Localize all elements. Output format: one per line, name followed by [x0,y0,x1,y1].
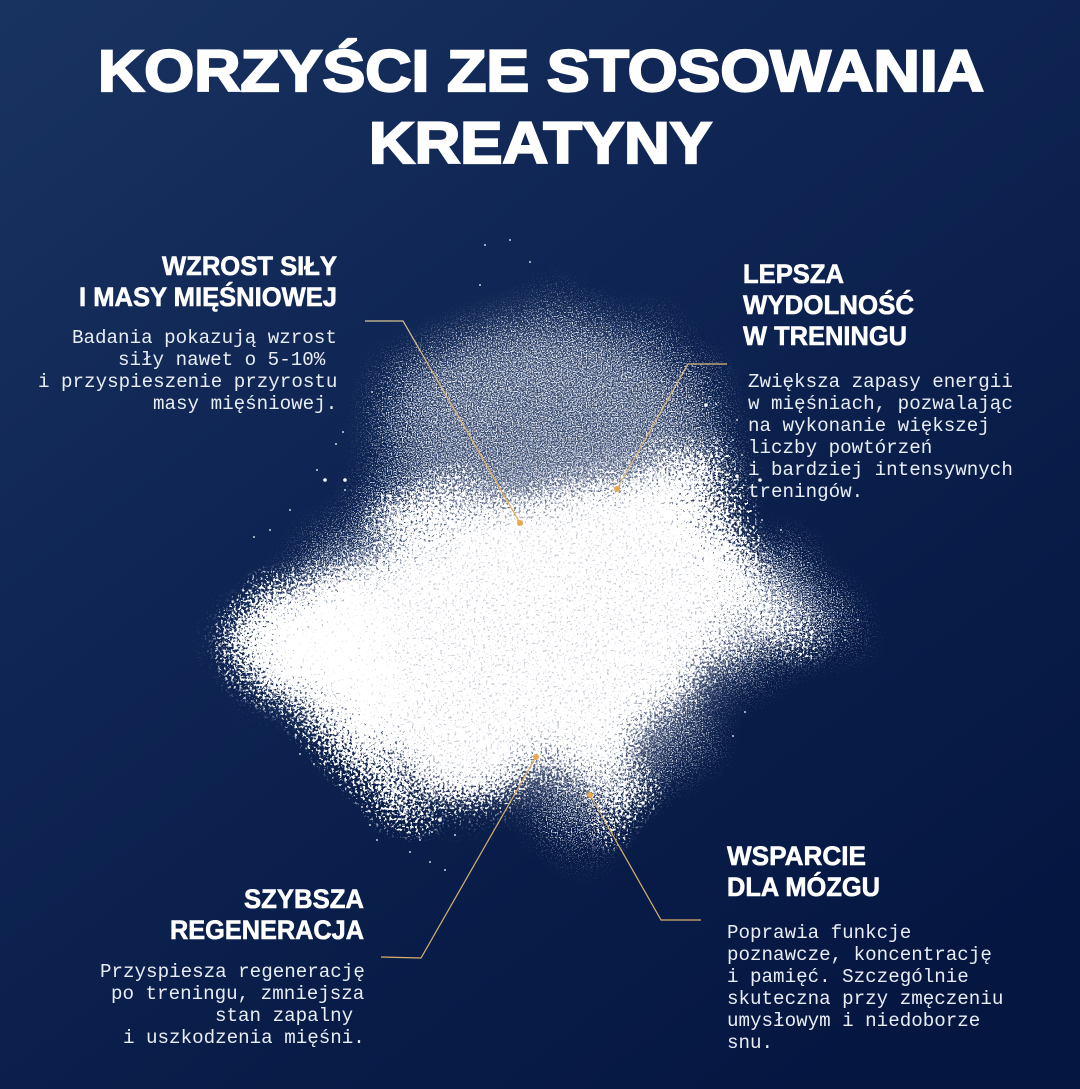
heading: muscle strength [79,251,337,312]
heading: brain [727,841,880,902]
text: muscle strength: siły nawet o 5-10% [118,349,326,371]
heading: training capacity: W TRENINGU [743,321,907,351]
text: regeneration: i uszkodzenia mięśni. [123,1027,365,1049]
text: training capacity: liczby powtórzeń [748,437,932,459]
text: training capacity: i bardziej intensywnych [748,459,1013,481]
text: brain: skuteczna przy zmęczeniu [727,988,1003,1010]
text: training capacity [748,371,1013,503]
connector: regeneration [381,754,539,958]
text: muscle strength: Badania pokazują wzrost [72,327,337,349]
text: brain: i pamięć. Szczególnie [727,966,969,988]
connector: brain [587,792,701,920]
text: training capacity: treningów. [748,481,863,503]
heading: regeneration [170,884,364,945]
specks [226,240,858,870]
text: training capacity: Zwiększa zapasy energii [748,371,1013,393]
text: training capacity: w mięśniach, pozwalając [748,393,1013,415]
text: brain: poznawcze, koncentrację [727,944,992,966]
panel: muscle strength [38,251,337,415]
text: muscle strength: i przyspieszenie przyrostu [38,371,337,393]
text: regeneration: po treningu, zmniejsza [111,983,364,1005]
text: regeneration: stan zapalny [215,1005,353,1027]
heading: brain: DLA MÓZGU [727,872,880,902]
text: regeneration [100,961,365,1049]
connector: muscle strength [365,321,523,526]
text: training capacity: na wykonanie większej [748,415,990,437]
text: brain [727,922,1003,1054]
heading: training capacity [743,259,914,351]
heading: muscle strength: I MASY MIĘŚNIOWEJ [79,282,337,312]
panel: regeneration [100,884,365,1049]
text: muscle strength: masy mięśniowej. [153,393,337,415]
heading: brain: WSPARCIE [727,841,866,871]
heading: regeneration: SZYBSZA [244,884,364,914]
heading: training capacity: WYDOLNOŚĆ [743,290,914,320]
heading: regeneration: REGENERACJA [170,915,364,945]
text: regeneration: Przyspiesza regenerację [100,961,365,983]
text: brain: Poprawia funkcje [727,922,911,944]
text: muscle strength [38,327,337,415]
connector: training capacity [614,364,727,492]
title: KORZYŚCI ZE STOSOWANIA [98,39,984,104]
heading: training capacity: LEPSZA [743,259,844,289]
title [98,39,984,176]
panel: training capacity [743,259,1013,503]
text: brain: snu. [727,1032,773,1054]
powder explosion [225,240,860,870]
title: KREATYNY [369,111,712,176]
heading: muscle strength: WZROST SIŁY [162,251,337,281]
text: brain: umysłowym i niedoborze [727,1010,980,1032]
panel: brain [727,841,1003,1054]
